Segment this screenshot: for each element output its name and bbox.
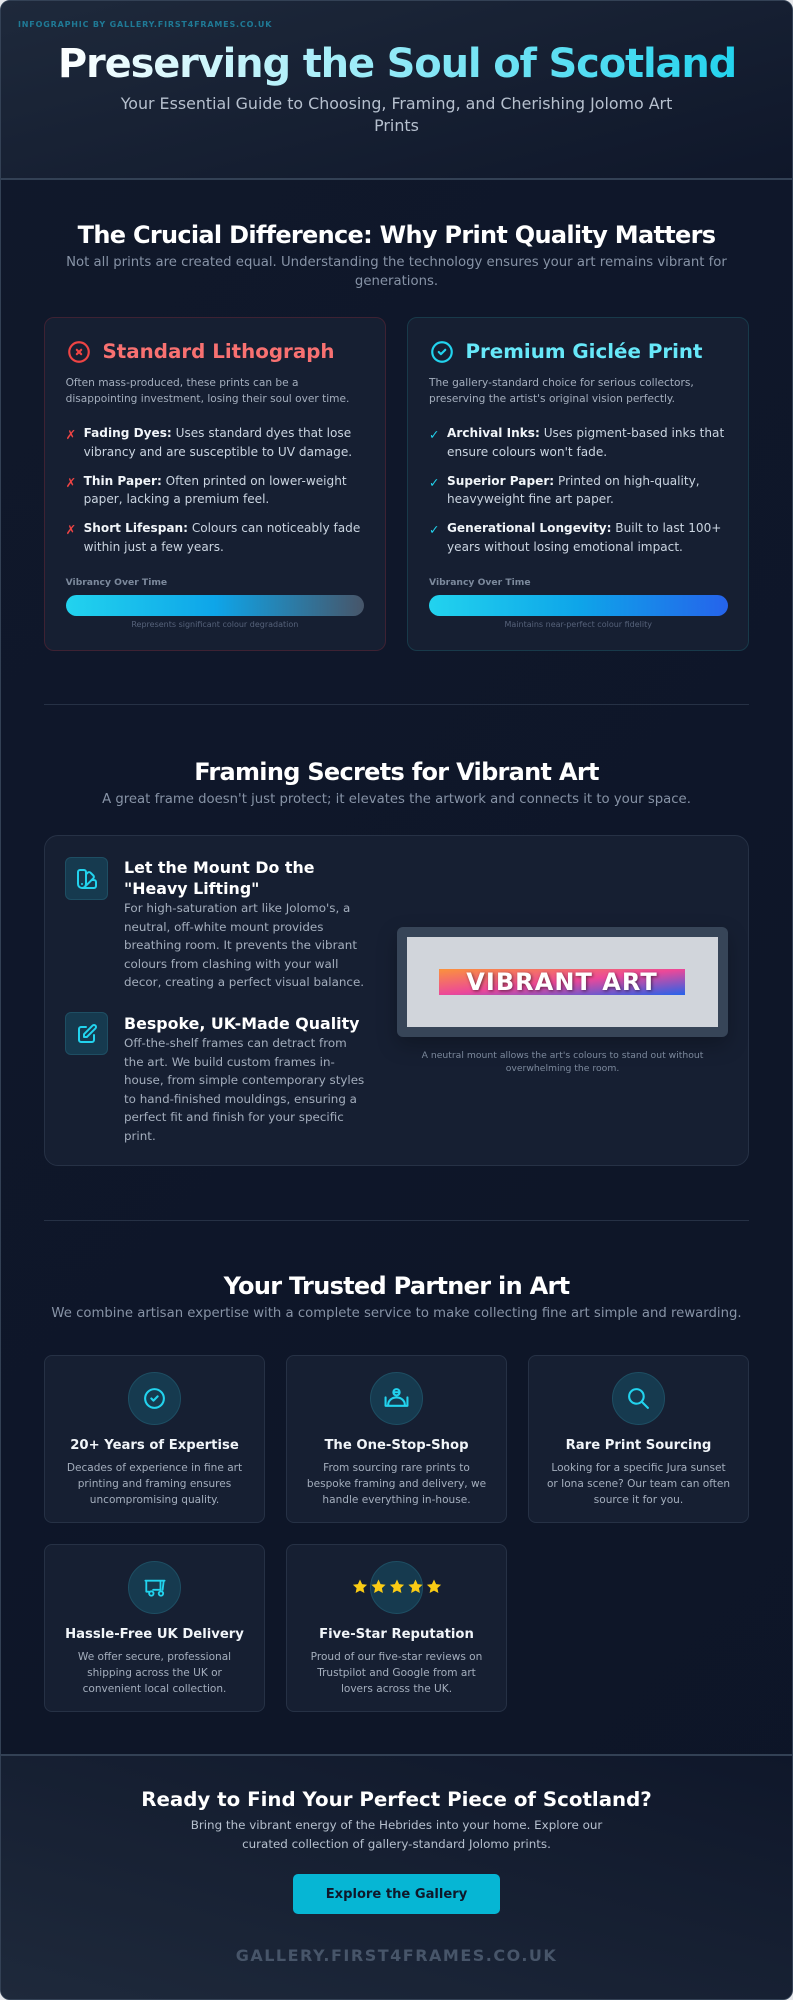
tip body: bespoke: to hand-finished mouldings, ensuring a <box>124 1092 357 1106</box>
frame caption: overwhelming the room. <box>506 1063 619 1074</box>
card title: Premium Giclée Print <box>466 340 703 363</box>
card text <box>307 1462 486 1506</box>
card text: or Iona scene? Our team can often <box>547 1478 730 1490</box>
card: rare print sourcing <box>528 1355 749 1523</box>
tip heading: mount: "Heavy Lifting" <box>124 878 259 898</box>
list item: superior paper: ✓ <box>429 475 439 490</box>
card: one-stop-shop <box>286 1355 507 1523</box>
card text <box>67 1462 242 1506</box>
footer text: Bring the vibrant energy of the Hebrides into your home. Explore our <box>191 1818 602 1832</box>
tip body: mount: breathing room. It prevents the vibrant <box>124 938 357 952</box>
description: preserving the artist's original vision perfectly. <box>429 393 675 405</box>
chart label: Vibrancy Over Time <box>66 577 167 588</box>
star rating <box>353 1580 441 1593</box>
card text <box>78 1651 231 1695</box>
list item: thin paper: Thin Paper: Often printed on lower-weight <box>84 474 347 488</box>
card text: shipping across the UK or <box>87 1667 222 1679</box>
list item: generational longevity: ✓ <box>429 522 439 537</box>
mount <box>407 937 718 1027</box>
footer heading: Ready to Find Your Perfect Piece of Scotland? <box>141 1788 652 1810</box>
card title: The One-Stop-Shop <box>324 1438 469 1453</box>
description <box>428 377 694 405</box>
list item: fading dyes: ✗ <box>66 427 76 442</box>
art print: VIBRANT ART <box>466 968 658 996</box>
footer url: GALLERY.FIRST4FRAMES.CO.UK <box>236 1946 557 1965</box>
card text: lovers across the UK. <box>341 1683 452 1695</box>
panel: premium giclee <box>407 317 749 651</box>
tip body: bespoke: house, from simple contemporary styles <box>124 1073 364 1087</box>
icon: service <box>370 1372 422 1425</box>
card: reputation <box>286 1544 507 1712</box>
list item: thin paper: paper, lacking a premium feel. <box>84 492 269 506</box>
tip body: bespoke: perfect fit and finish for your specific <box>124 1110 344 1124</box>
subtitle <box>120 94 672 134</box>
card text: uncompromising quality. <box>90 1494 219 1506</box>
card text <box>311 1651 482 1695</box>
list item: generational longevity: years without losing emotional impact. <box>447 540 683 554</box>
card text: convenient local collection. <box>83 1683 226 1695</box>
icon: x circle <box>68 341 90 363</box>
section heading: partner: Your Trusted Partner in Art <box>224 1272 569 1300</box>
list item: short lifespan: within just a few years. <box>84 540 224 554</box>
card text: handle everything in-house. <box>322 1494 471 1506</box>
icon circle <box>370 1561 422 1614</box>
frame caption: A neutral mount allows the art's colours to stand out without <box>422 1050 703 1061</box>
card title: Rare Print Sourcing <box>566 1438 711 1453</box>
card: delivery <box>44 1544 265 1712</box>
section heading: framing: Framing Secrets for Vibrant Art <box>194 758 599 786</box>
frame illustration <box>397 927 728 1037</box>
icon: swatch <box>65 857 108 900</box>
card text: Trustpilot and Google from art <box>317 1667 476 1679</box>
section heading: print quality: The Crucial Difference: Why Print Quality Matters <box>78 221 715 249</box>
icon: badge check <box>128 1372 180 1425</box>
chart label: Vibrancy Over Time <box>429 577 531 588</box>
frame caption <box>422 1050 704 1074</box>
chart note: Represents significant colour degradation <box>131 620 298 629</box>
tip body: mount: For high-saturation art like Jolomo's, a <box>124 901 350 915</box>
card text: Looking for a specific Jura sunset <box>551 1462 726 1474</box>
card text <box>547 1462 730 1506</box>
tip heading: bespoke: Bespoke, UK-Made Quality <box>124 1014 359 1032</box>
list item: fading dyes <box>66 426 352 459</box>
list item: thin paper <box>66 474 347 506</box>
card text: Decades of experience in fine art <box>67 1462 242 1474</box>
card text: printing and framing ensures <box>78 1478 231 1490</box>
tip body: mount: decor, creating a perfect visual balance. <box>124 975 364 989</box>
tip heading: mount <box>124 858 314 898</box>
footer text: curated collection of gallery-standard Jolomo prints. <box>242 1837 551 1851</box>
tip body: bespoke: print. <box>124 1128 156 1142</box>
list item: generational longevity <box>429 521 721 554</box>
tip heading: mount: Let the Mount Do the <box>124 858 314 876</box>
button: explore: Explore the Gallery <box>326 1887 467 1902</box>
section intro: print quality: Not all prints are created equal. Understanding the technology ensures your art remains vibrant for <box>66 255 727 270</box>
description: The gallery-standard choice for serious collectors, <box>429 377 694 389</box>
list item: short lifespan: ✗ <box>66 522 76 537</box>
list item: superior paper: Superior Paper: Printed on high-quality, <box>447 474 700 488</box>
list item: thin paper: ✗ <box>66 475 76 490</box>
card text: source it for you. <box>594 1494 683 1506</box>
list item: archival inks <box>429 426 724 459</box>
tip body: mount: neutral, off-white mount provides <box>124 920 323 934</box>
card title: Standard Lithograph <box>102 340 335 363</box>
card text: From sourcing rare prints to <box>323 1462 470 1474</box>
list item: archival inks: ensure colours won't fade. <box>447 445 607 459</box>
tip body: mount <box>124 901 364 989</box>
list item: archival inks: ✓ <box>429 427 439 442</box>
subtitle: Prints <box>374 116 419 134</box>
list item: short lifespan <box>66 521 360 554</box>
panel: standard lithograph <box>44 317 386 651</box>
card text: We offer secure, professional <box>78 1651 231 1663</box>
tip body: bespoke: Off-the-shelf frames can detract from <box>124 1036 347 1050</box>
description: Often mass-produced, these prints can be a <box>66 377 299 389</box>
title: Preserving the Soul of Scotland <box>58 41 736 87</box>
description <box>66 377 349 405</box>
list item: superior paper: heavyweight fine art paper. <box>447 492 614 506</box>
bar: vibrancy fading <box>66 595 364 616</box>
section intro: print quality <box>66 255 727 289</box>
footer text <box>191 1818 602 1851</box>
panel: framing secrets <box>44 835 749 1166</box>
list item: generational longevity: Generational Longevity: Built to last 100+ <box>447 521 721 535</box>
card title: Five-Star Reputation <box>319 1627 474 1642</box>
footer band <box>1 1754 792 1999</box>
icon: pencil <box>65 1012 108 1055</box>
tip body: mount: colours from clashing with your wall <box>124 956 338 970</box>
header band <box>1 1 792 180</box>
card text: bespoke framing and delivery, we <box>307 1478 486 1490</box>
section intro: framing: A great frame doesn't just protect; it elevates the artwork and connects it to your space. <box>102 792 691 807</box>
list item: fading dyes: vibrancy and are susceptible to UV damage. <box>84 445 352 459</box>
list item: superior paper <box>429 474 700 506</box>
chart note: Maintains near-perfect colour fidelity <box>504 620 652 629</box>
subtitle: Your Essential Guide to Choosing, Framing, and Cherishing Jolomo Art <box>121 94 672 113</box>
tip body: bespoke: the art. We build custom frames in- <box>124 1054 335 1068</box>
list item: short lifespan: Short Lifespan: Colours can noticeably fade <box>84 521 360 535</box>
description: disappointing investment, losing their soul over time. <box>66 393 349 405</box>
button: explore <box>293 1874 500 1914</box>
card: expertise <box>44 1355 265 1523</box>
icon: check circle <box>431 341 453 363</box>
tip body: bespoke <box>124 1036 364 1142</box>
icon: truck <box>128 1561 180 1614</box>
byline tag: INFOGRAPHIC BY GALLERY.FIRST4FRAMES.CO.UK <box>18 20 272 28</box>
list item: archival inks: Archival Inks: Uses pigment-based inks that <box>447 426 724 440</box>
card title: 20+ Years of Expertise <box>70 1438 239 1453</box>
icon: search <box>612 1372 664 1425</box>
list item: fading dyes: Fading Dyes: Uses standard dyes that lose <box>84 426 351 440</box>
section intro: partner: We combine artisan expertise with a complete service to make collecting fine art simple and rewarding. <box>51 1306 742 1321</box>
bar: vibrancy maintained <box>429 595 728 616</box>
card title: Hassle-Free UK Delivery <box>65 1627 244 1642</box>
card text: Proud of our five-star reviews on <box>311 1651 482 1663</box>
section intro: print quality: generations. <box>355 274 438 289</box>
